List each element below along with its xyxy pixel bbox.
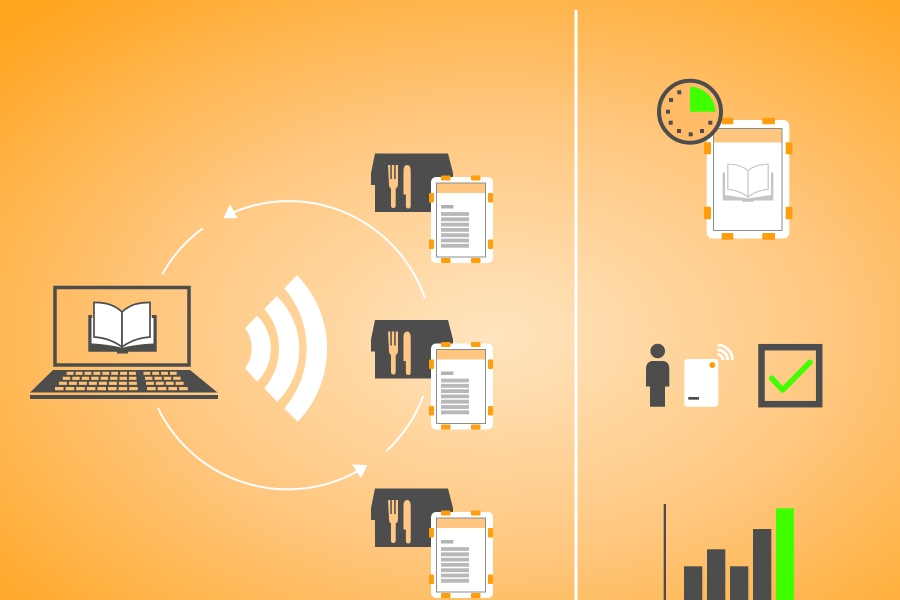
icon: tablet with book	[704, 118, 792, 240]
arrow: top arc	[223, 201, 425, 298]
restaurant with digital menu: top	[371, 154, 493, 263]
icon: smart device with signal	[684, 345, 732, 407]
restaurant with digital menu: bottom	[371, 488, 493, 598]
arrow: bottom arc	[158, 408, 367, 489]
icon: person	[646, 344, 669, 407]
vertical divider	[574, 10, 578, 600]
icon: green check box	[762, 347, 819, 404]
icon: laptop with open book	[30, 288, 218, 399]
icon: open book	[88, 302, 157, 354]
arc: right segment	[387, 396, 423, 451]
circular arrows	[158, 201, 425, 489]
restaurant with digital menu: middle	[371, 320, 493, 430]
icon: wireless signal waves	[245, 275, 327, 422]
arc: left segment	[162, 228, 203, 274]
icon: grey book	[723, 164, 773, 202]
bar chart	[664, 504, 794, 600]
icon: clock with green quarter	[659, 81, 721, 143]
